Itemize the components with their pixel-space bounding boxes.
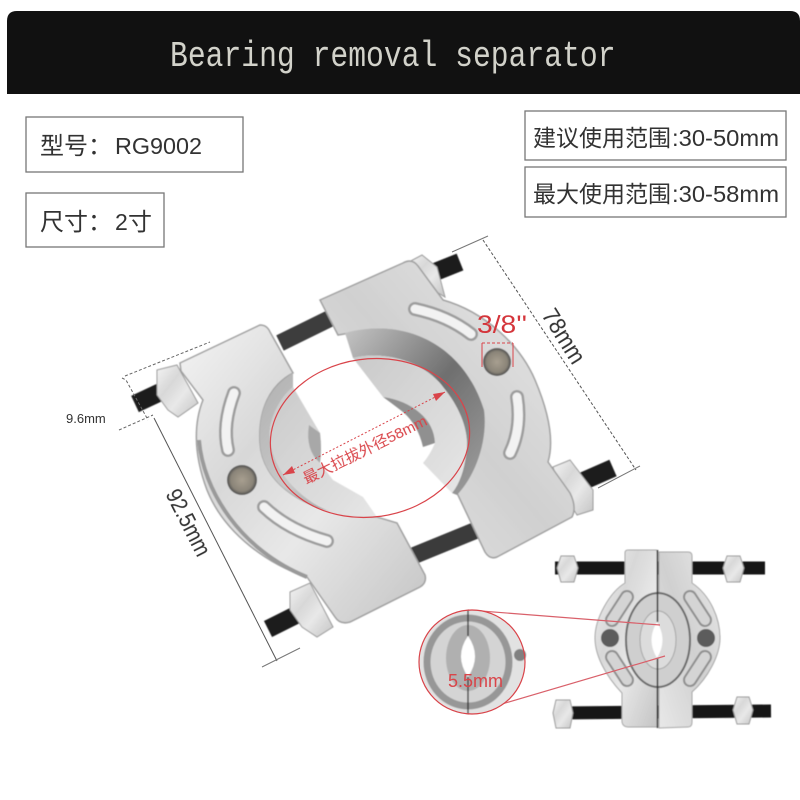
inset circle xyxy=(419,610,526,714)
box: model number: RG9002 xyxy=(115,133,202,159)
left centre plate xyxy=(270,387,377,517)
small left half xyxy=(595,550,657,727)
small assembled separator illustration xyxy=(553,550,771,728)
magnified detail inset xyxy=(419,610,665,714)
dimension: 92.5mm xyxy=(154,418,300,667)
box: maximum range xyxy=(525,167,786,217)
right jaw xyxy=(320,261,574,558)
small nuts xyxy=(553,556,753,728)
hex nuts xyxy=(157,255,593,637)
box: model number: 型号： xyxy=(40,133,112,160)
small centre opening xyxy=(652,622,662,658)
jaw slots xyxy=(226,309,518,541)
measurement text: 5.5mm xyxy=(448,671,503,691)
right centre plate xyxy=(353,356,467,493)
leader lines xyxy=(468,610,665,714)
callout: max pull diameter circle xyxy=(260,346,480,530)
box: recommended range xyxy=(525,111,786,160)
title text: Bearing removal separator xyxy=(170,37,616,77)
threaded rods xyxy=(135,262,613,629)
callout: 3/8 inch hole: 3/8'' xyxy=(477,311,527,339)
box: size: 尺寸： xyxy=(40,209,112,236)
box: size xyxy=(26,193,164,247)
small rods xyxy=(555,568,771,713)
left jaw xyxy=(180,325,425,623)
dimension: 9.6mm: 9.6mm xyxy=(66,411,106,426)
box: recommended range: :30-50mm xyxy=(672,125,779,151)
callout: max pull diameter circle: 最大拉拔外径58mm xyxy=(300,413,430,488)
dimension: 78mm xyxy=(452,236,640,488)
box: recommended range: 建议使用范围 xyxy=(533,125,671,151)
title banner xyxy=(7,11,800,94)
callout: 3/8 inch hole xyxy=(477,311,527,367)
box: maximum range: 最大使用范围 xyxy=(533,181,671,207)
box: size: 寸 xyxy=(128,209,152,236)
small inner ring xyxy=(626,593,690,687)
box: maximum range: :30-58mm xyxy=(672,181,779,207)
small right half xyxy=(659,552,720,728)
dimension: 92.5mm: 92.5mm xyxy=(161,484,216,560)
dimension: 9.6mm xyxy=(66,342,210,430)
main bearing separator illustration xyxy=(135,255,613,637)
box: model number xyxy=(26,117,243,172)
box: size: 2 xyxy=(115,209,128,235)
bolt holes xyxy=(227,465,257,495)
small holes xyxy=(601,629,619,647)
small slots xyxy=(612,597,705,680)
dimension: 78mm: 78mm xyxy=(536,304,591,369)
